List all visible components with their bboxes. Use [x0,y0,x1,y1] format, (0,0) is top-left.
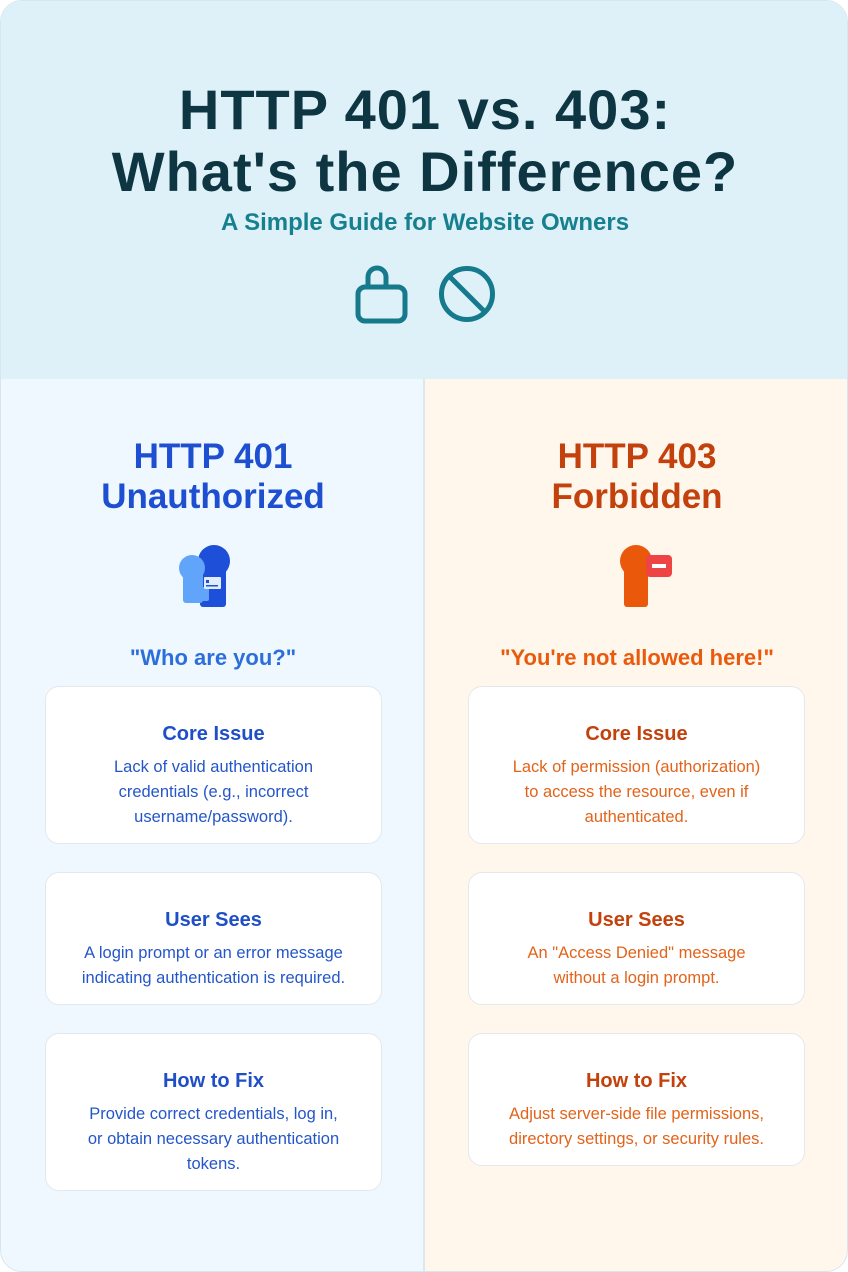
card: 401 how to fix: How to Fix [163,1070,264,1092]
card: 403 user sees: without a login prompt. [553,969,720,987]
heading 401: Unauthorized [101,477,325,516]
quote 401: "Who are you?" [130,645,296,670]
quote 403: "You're not allowed here!" [500,645,774,670]
panel: 403 [425,379,848,1272]
card: 403 core issue: Lack of permission (authorization) [513,758,760,776]
card: 403 how to fix: Adjust server-side file permissions, [509,1105,764,1123]
card: 401 core issue: Core Issue [162,723,265,745]
icon: user with minus [620,545,672,607]
card: 403 user sees: User Sees [588,909,685,931]
card: 401 how to fix: Provide correct credentials, log in, [89,1105,338,1123]
icon: users with badge [179,545,230,607]
card: 401 core issue [45,686,382,844]
heading 403 [551,437,723,516]
subtitle: A Simple Guide for Website Owners [221,209,629,236]
heading 401: HTTP 401 [134,437,292,476]
card: 403 how to fix: directory settings, or security rules. [509,1130,764,1148]
header panel [1,1,848,379]
card: 403 how to fix: How to Fix [586,1070,687,1092]
card: 401 user sees: A login prompt or an error message [84,944,343,962]
heading 401 [101,437,325,516]
card: 403 core issue [468,686,805,844]
card: 401 user sees [45,872,382,1005]
card: 403 user sees [468,872,805,1005]
card: 403 core issue: authenticated. [585,808,688,826]
card: 401 how to fix: tokens. [187,1155,240,1173]
card: 401 core issue: Lack of valid authentication [114,758,313,776]
title [112,78,738,203]
card: 403 how to fix [468,1033,805,1166]
card: 403 user sees: An "Access Denied" message [527,944,746,962]
title: HTTP 401 vs. 403: [179,78,671,141]
card: 403 core issue: to access the resource, even if [525,783,748,801]
card: 401 how to fix [45,1033,382,1191]
card: 401 core issue: credentials (e.g., incorrect [119,783,308,801]
card: 401 how to fix: or obtain necessary authentication [88,1130,339,1148]
card: 401 user sees: indicating authentication is required. [82,969,345,987]
card: 401 user sees: User Sees [165,909,262,931]
card: 403 core issue: Core Issue [585,723,688,745]
panel: 401 [1,379,425,1272]
heading 403: HTTP 403 [558,437,716,476]
icon: lock [356,266,408,324]
heading 403: Forbidden [551,477,723,516]
icon: ban [439,266,495,322]
card: 401 core issue: username/password). [134,808,293,826]
title: What's the Difference? [112,140,738,203]
